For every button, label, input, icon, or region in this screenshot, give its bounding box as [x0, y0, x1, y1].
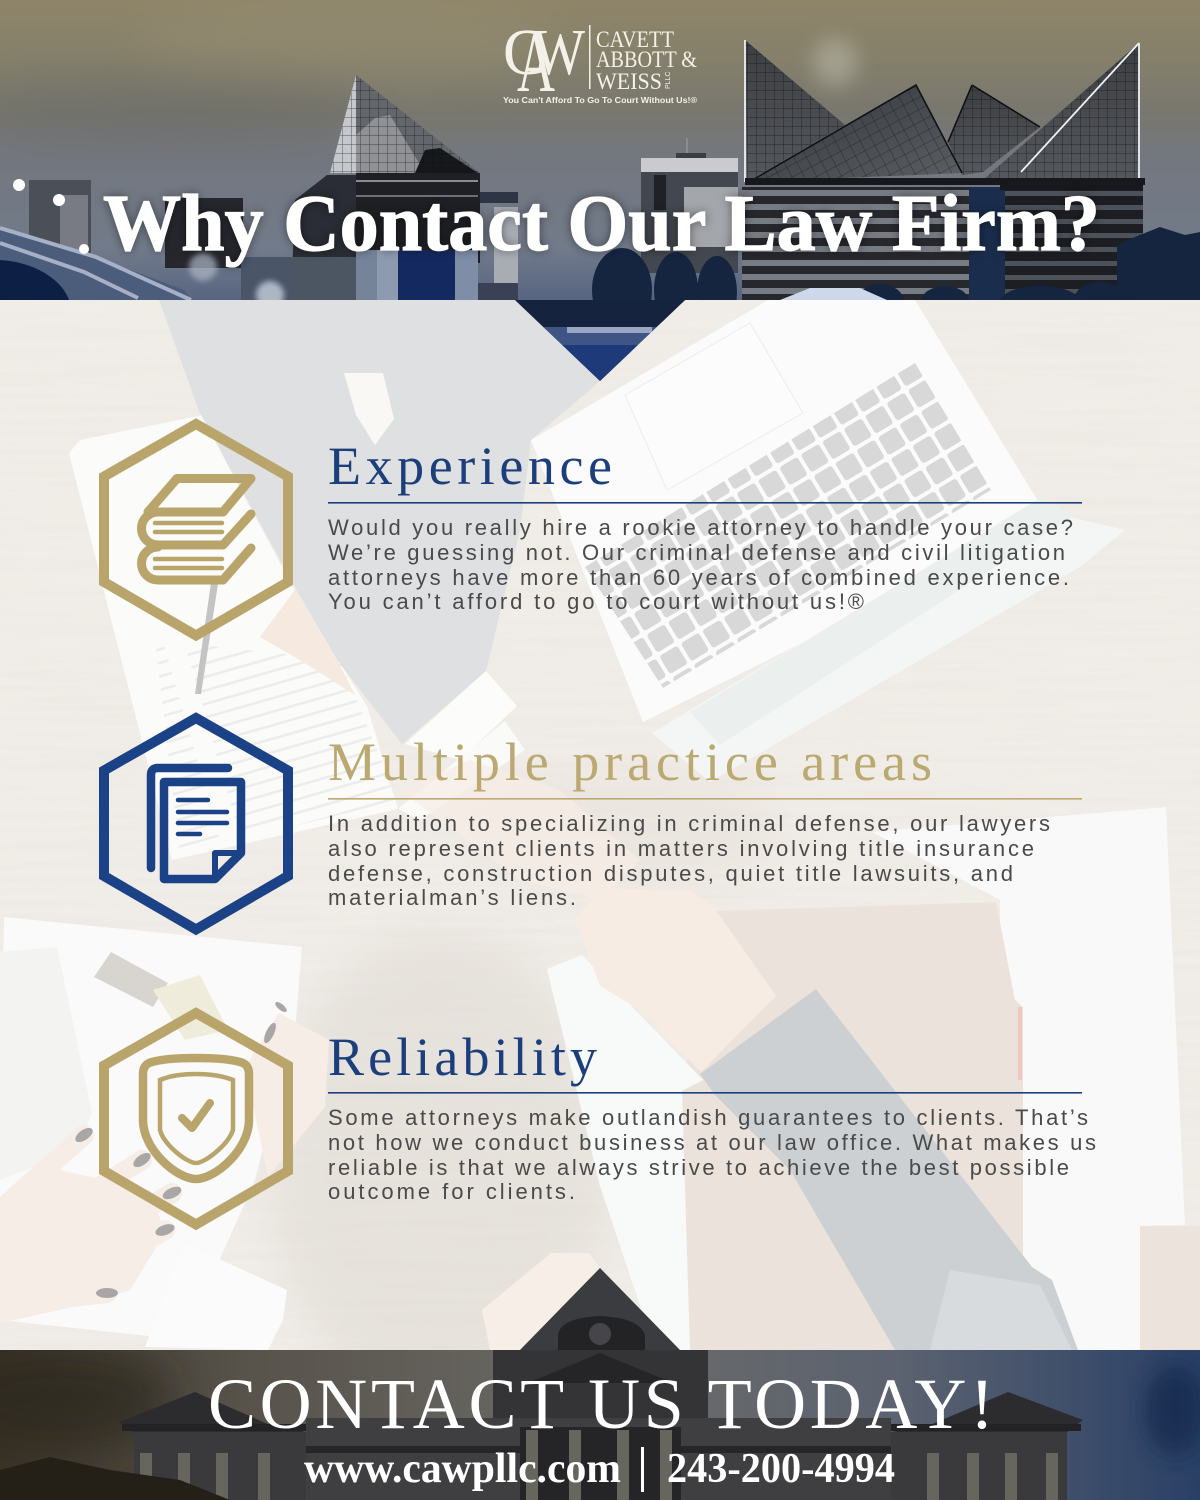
contact details: www.cawpllc.com — [304, 1446, 621, 1492]
text: Experience body: We’re guessing not. Our criminal defense and civil litigation — [328, 540, 1065, 565]
text: Multiple practice areas body: also represent clients in matters involving title insurance — [328, 836, 1034, 861]
centre office tower — [641, 172, 738, 273]
courthouse — [119, 1316, 1083, 1500]
text: Experience body: Would you really hire a rookie attorney to handle your case? — [328, 515, 1073, 540]
top left paper — [69, 415, 398, 860]
lower documents, top left — [398, 721, 525, 820]
right hand — [245, 1013, 329, 1177]
heading: Multiple practice areas: Multiple practice areas — [328, 732, 932, 792]
dark sleeve, bottom right — [700, 989, 1078, 1350]
footer heading: CONTACT US TODAY! — [208, 1364, 994, 1444]
white sleeve — [145, 1243, 287, 1350]
text: Multiple practice areas body: materialman’s liens. — [328, 885, 576, 910]
text: Reliability body: Some attorneys make outlandish guarantees to clients. That’s — [328, 1105, 1088, 1130]
contact details — [304, 1446, 895, 1492]
dark suit sleeve, top left — [159, 300, 600, 744]
text: Experience body: You can’t afford to go to court without us!® — [328, 589, 864, 614]
panel: header skyline photo — [0, 0, 1200, 381]
panel: Multiple practice areas — [104, 718, 1082, 930]
text: Experience body: attorneys have more than 60 years of combined experience. — [328, 565, 1069, 590]
heading: Experience: Experience — [328, 436, 612, 496]
panel: Experience — [104, 424, 1082, 636]
panel: Reliability — [104, 1013, 1096, 1224]
hand, top — [260, 590, 355, 695]
text: Multiple practice areas body: defense, construction disputes, quiet title lawsuits, and — [328, 861, 1013, 886]
text: Reliability body — [328, 1105, 1096, 1204]
text: Reliability body: not how we conduct business at our law office. What makes us — [328, 1130, 1096, 1155]
left skyline — [29, 180, 91, 260]
logo: A — [517, 14, 555, 110]
icon: documents in hexagon — [104, 718, 288, 930]
lower centre hand — [482, 1253, 600, 1350]
text: Reliability body: reliable is that we always strive to achieve the best possible — [328, 1155, 1069, 1180]
title: Why Contact Our Law Firm? — [103, 180, 1100, 268]
folder — [680, 902, 1023, 1350]
text: Multiple practice areas body: In addition to specializing in criminal defense, our lawyers — [328, 811, 1050, 836]
logo: CAVETT — [596, 27, 674, 52]
laptop — [531, 300, 1125, 782]
text: Reliability body: outcome for clients. — [328, 1179, 575, 1204]
hand under cuff — [400, 760, 640, 900]
icon: books in hexagon — [104, 424, 288, 636]
shirt cuff, bottom — [547, 955, 703, 1350]
trees — [592, 227, 1200, 321]
panel: photo collage background — [0, 300, 1200, 1410]
notebook in sleeve — [344, 373, 394, 445]
logo: PLLC — [665, 71, 672, 89]
contact details: 243-200-4994 — [667, 1446, 895, 1492]
folder tab — [1018, 1007, 1022, 1080]
aquarium pyramids — [742, 187, 969, 303]
panel: footer courthouse photo — [0, 1268, 1200, 1500]
bridge — [0, 228, 192, 300]
title: Why Contact Our Law Firm? — [103, 180, 1100, 268]
logo: W — [533, 16, 586, 89]
bottom left papers — [0, 917, 302, 1340]
right paper — [872, 807, 1185, 1350]
text: Experience body — [328, 515, 1073, 614]
notch view — [515, 300, 685, 330]
nails — [73, 1000, 288, 1298]
logo: WEISS — [596, 69, 662, 94]
handshake — [575, 888, 776, 1072]
heading: Reliability: Reliability — [328, 1027, 597, 1087]
clipboard clip — [94, 952, 168, 1007]
left hand — [0, 1135, 172, 1323]
logo: C — [503, 16, 545, 89]
main glass tower — [292, 175, 356, 257]
logo: ABBOTT & — [596, 47, 697, 72]
text: Multiple practice areas body — [328, 811, 1050, 910]
logo: You Can't Afford To Go To Court Without Us!® — [503, 95, 698, 105]
pen — [195, 583, 218, 694]
logo — [503, 14, 698, 110]
icon: shield in hexagon — [104, 1013, 288, 1224]
shirt cuff, top — [405, 671, 517, 760]
